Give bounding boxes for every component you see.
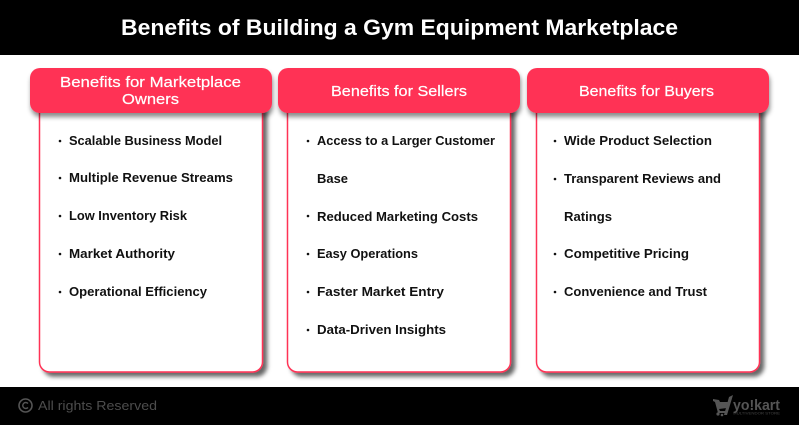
panel heading: buyers xyxy=(527,68,769,113)
footer bar xyxy=(0,387,799,425)
list: buyer benefits: Transparent Reviews and xyxy=(564,172,721,186)
list: marketplace owner benefits xyxy=(59,134,233,299)
list: marketplace owner benefits: Low Inventory Risk xyxy=(69,209,187,223)
list: buyer benefits: Convenience and Trust xyxy=(564,285,708,299)
list: marketplace owner benefits: Operational Efficiency xyxy=(69,285,207,299)
list: seller benefits: Easy Operations xyxy=(317,247,418,261)
list: marketplace owner benefits: Market Authority xyxy=(69,247,175,261)
list: seller benefits xyxy=(307,134,495,337)
footer text: All rights Reserved xyxy=(38,398,157,413)
list: buyer benefits: Competitive Pricing xyxy=(564,247,689,261)
logo: yolkart: MULTIVENDOR STORE xyxy=(733,412,781,416)
list: buyer benefits xyxy=(554,134,721,299)
icon: copyright xyxy=(19,399,32,412)
title banner xyxy=(0,0,799,55)
list: buyer benefits: Wide Product Selection xyxy=(564,134,712,148)
panel heading: marketplace owners xyxy=(30,68,272,113)
panel heading: buyers: Benefits for Buyers xyxy=(579,83,714,100)
list: seller benefits: Access to a Larger Customer xyxy=(317,134,495,148)
list: seller benefits: Faster Market Entry xyxy=(317,285,444,299)
panel: buyers xyxy=(527,68,769,372)
list: marketplace owner benefits: Scalable Business Model xyxy=(69,134,222,148)
logo: yolkart xyxy=(713,395,781,416)
list: buyer benefits: Ratings xyxy=(564,210,612,224)
list: seller benefits: Reduced Marketing Costs xyxy=(317,210,478,224)
panel heading: sellers: Benefits for Sellers xyxy=(331,83,467,100)
panel heading: marketplace owners: Benefits for Marketplace xyxy=(60,74,241,91)
list: seller benefits: Data-Driven Insights xyxy=(317,323,446,337)
list: seller benefits: Base xyxy=(317,172,348,186)
panel: marketplace owners xyxy=(30,68,272,372)
panel heading: sellers xyxy=(278,68,520,113)
logo: yolkart: yo!kart xyxy=(733,397,780,414)
panel heading: marketplace owners: Owners xyxy=(122,91,179,108)
title banner: Benefits of Building a Gym Equipment Marketplace xyxy=(121,15,678,40)
panel: sellers xyxy=(278,68,520,372)
list: marketplace owner benefits: Multiple Revenue Streams xyxy=(69,171,233,185)
